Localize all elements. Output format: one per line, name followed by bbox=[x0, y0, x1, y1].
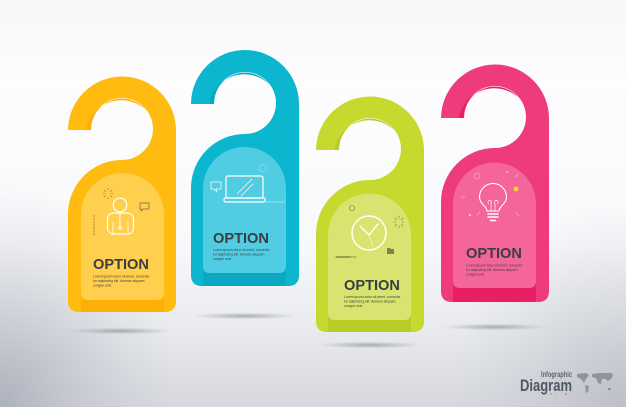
panel: yellow door hanger bbox=[68, 76, 176, 312]
logo: infographic diagram: Diagram bbox=[520, 376, 572, 395]
heading: option blue: OPTION bbox=[213, 231, 269, 247]
text block blue: tur adipiscing elit. Aenean aliquam bbox=[213, 252, 265, 256]
icon: laptop bbox=[211, 164, 285, 202]
text block pink: congue erat. bbox=[466, 272, 485, 276]
text block blue: congue erat. bbox=[213, 257, 232, 261]
icon: clock bbox=[336, 206, 404, 257]
logo: infographic diagram bbox=[520, 370, 613, 395]
panel: green door hanger bbox=[316, 96, 424, 332]
text block yellow: congue erat. bbox=[93, 284, 112, 288]
text block blue: Lorem ipsum dolor sit amet, consecte bbox=[213, 248, 269, 252]
text block pink: tur adipiscing elit. Aenean aliquam bbox=[466, 268, 518, 272]
logo: infographic diagram: Infographic bbox=[541, 370, 572, 379]
panel: pink door hanger bbox=[441, 64, 549, 302]
heading: option green: OPTION bbox=[344, 278, 400, 294]
text block yellow: Lorem ipsum dolor sit amet, consecte bbox=[93, 274, 149, 278]
text block green: congue erat. bbox=[344, 304, 363, 308]
floor shadows bbox=[67, 312, 548, 348]
panel: blue door hanger bbox=[191, 50, 299, 286]
heading: option pink: OPTION bbox=[466, 246, 522, 262]
icon: businessman bbox=[94, 188, 149, 236]
text block yellow: tur adipiscing elit. Aenean aliquam bbox=[93, 279, 145, 283]
icon: light bulb bbox=[461, 171, 519, 220]
heading: option yellow: OPTION bbox=[93, 257, 149, 273]
text block green: tur adipiscing elit. Aenean aliquam bbox=[344, 300, 396, 304]
text block green: Lorem ipsum dolor sit amet, consecte bbox=[344, 295, 400, 299]
text block pink: Lorem ipsum dolor sit amet, consecte bbox=[466, 264, 522, 268]
